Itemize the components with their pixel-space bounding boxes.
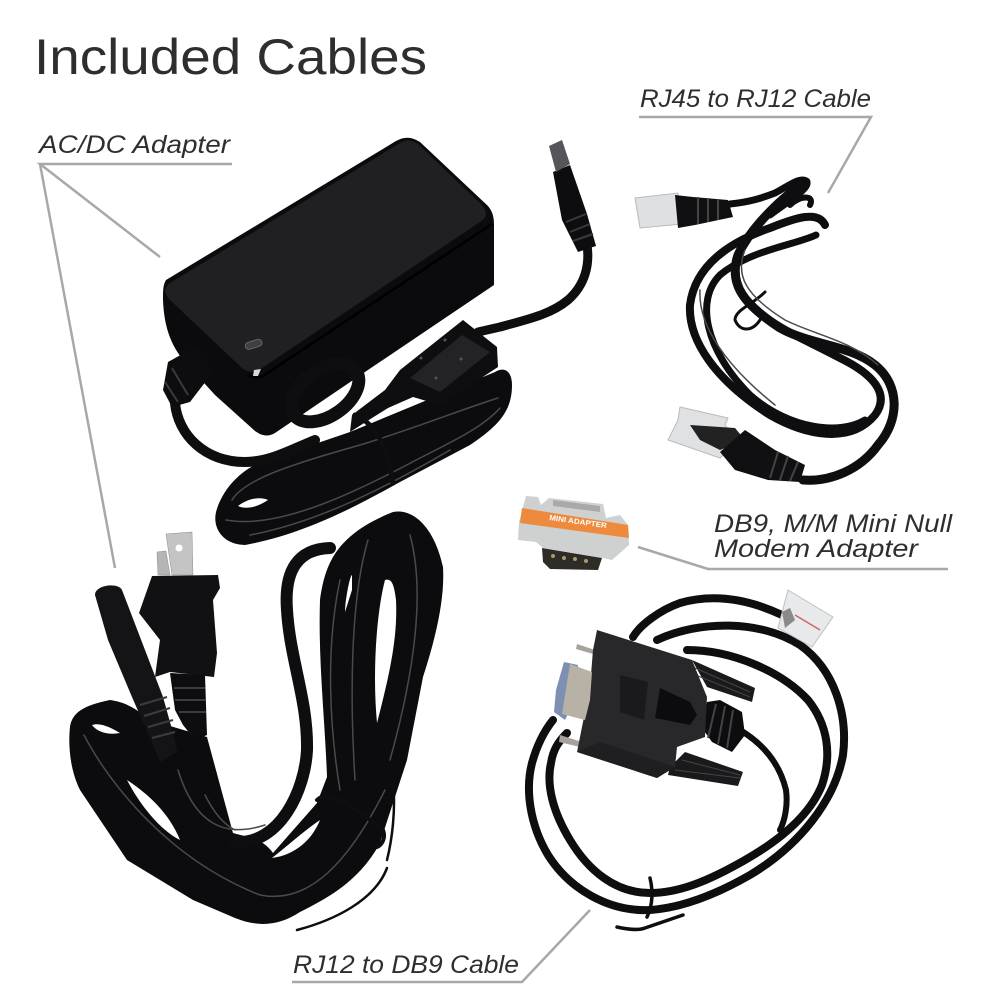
ferrite bead xyxy=(350,320,498,432)
DB9 M/M mini null modem adapter xyxy=(518,496,629,570)
DC plug tip xyxy=(549,140,570,172)
DB9 M/M mini null modem adapter: MINI ADAPTER xyxy=(549,513,608,530)
wire ends xyxy=(297,780,394,930)
RJ12 plug xyxy=(778,590,833,647)
left strain relief xyxy=(163,347,213,407)
power cord with plug and connector xyxy=(69,512,443,930)
label: DB9 Mini Null Modem Adapter: DB9, M/M Mini Null xyxy=(714,510,954,538)
cord tie xyxy=(317,796,384,847)
C7 connector xyxy=(95,585,177,762)
bottom RJ plug xyxy=(668,407,738,458)
cable tie xyxy=(617,878,683,929)
plug strain relief xyxy=(170,673,207,740)
RJ45 to RJ12 cable xyxy=(635,180,894,482)
dense cord bundle xyxy=(69,512,443,924)
plug prongs xyxy=(157,551,170,575)
DC plug relief and body xyxy=(553,165,596,252)
top RJ45 plug xyxy=(635,193,682,228)
metal body xyxy=(518,496,629,560)
AC/DC adapter power brick with cable xyxy=(163,138,596,545)
pins shell xyxy=(542,548,602,570)
DB9 hood xyxy=(577,630,707,778)
tie xyxy=(735,292,765,329)
cable to DC plug xyxy=(478,245,588,332)
brick top face xyxy=(166,140,486,372)
label: RJ45 to RJ12 Cable xyxy=(639,85,871,193)
label: RJ12 to DB9 Cable xyxy=(292,910,590,982)
label: DB9 Mini Null Modem Adapter xyxy=(638,510,954,569)
cable from brick to coil xyxy=(175,403,315,462)
DB9 boot xyxy=(702,700,745,752)
coiled cable bundle xyxy=(215,370,512,545)
DB9 fins xyxy=(692,660,755,702)
brick corner highlight xyxy=(253,369,261,376)
RJ12 to DB9 cable xyxy=(529,590,844,929)
ring loop xyxy=(281,352,369,434)
DB9 blue connector xyxy=(554,662,578,720)
cable tie on coil xyxy=(355,415,393,483)
label: RJ45 to RJ12 Cable: RJ45 to RJ12 Cable xyxy=(640,85,871,113)
DB9 screws xyxy=(576,644,595,654)
label: AC/DC Adapter: AC/DC Adapter xyxy=(37,131,232,159)
white gaps xyxy=(375,580,396,723)
label: DB9 Mini Null Modem Adapter: Modem Adapter xyxy=(714,535,920,563)
power LED xyxy=(244,338,263,350)
title: Included Cables xyxy=(34,29,427,85)
brick body xyxy=(163,138,494,435)
loop strand xyxy=(235,548,330,842)
plug body xyxy=(139,575,220,677)
label: RJ12 to DB9 Cable: RJ12 to DB9 Cable xyxy=(293,951,519,979)
label: AC/DC Adapter xyxy=(37,131,232,568)
orange band xyxy=(520,508,629,538)
